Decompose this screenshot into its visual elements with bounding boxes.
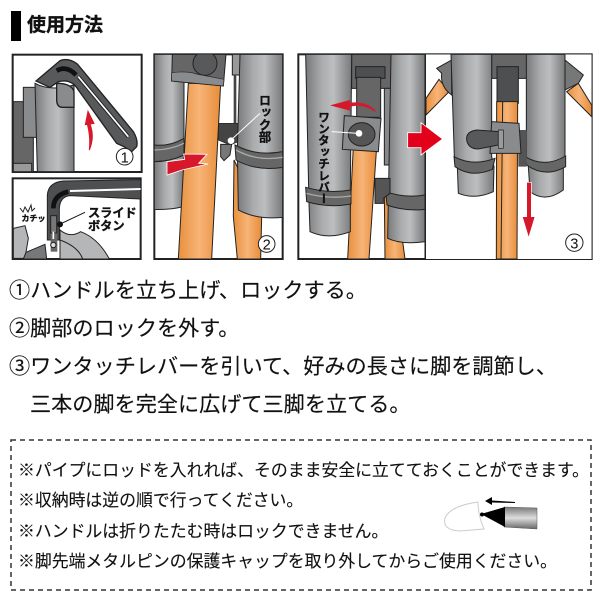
- notes text: ※脚先端メタルピンの保護キャップを取り外してからご使用ください。: [18, 551, 557, 571]
- icon: protective cap removal: [445, 497, 537, 531]
- instructions text: 三本の脚を完全に広げて三脚を立てる。: [30, 392, 411, 416]
- notes text: ※ハンドルは折りたたむ時はロックできません。: [18, 522, 388, 541]
- arrow: leg extend: [522, 182, 535, 238]
- panel: step 2 leg lock: [154, 51, 283, 259]
- label: slide button: スライド: [88, 206, 137, 220]
- panel: step 3 one-touch lever: [298, 54, 592, 259]
- left half: [352, 54, 391, 88]
- step number 3: [566, 234, 583, 252]
- label: カチッ: カチッ: [22, 214, 46, 223]
- step number 3: 3: [570, 236, 578, 252]
- label: one-touch lever: ワンタッチレバー: [316, 111, 330, 205]
- instructions text: ②脚部のロックを外す。: [9, 316, 239, 340]
- title: 使用方法: [27, 13, 103, 36]
- step number 2: [258, 236, 275, 254]
- panel: notes: [11, 440, 591, 590]
- panel: step 1 handle: [13, 55, 142, 172]
- right half: [426, 54, 592, 259]
- arrow: pull out: [167, 154, 208, 175]
- step number 1: 1: [121, 150, 129, 166]
- label: カチッ: [20, 205, 46, 223]
- instructions text: ①ハンドルを立ち上げ、ロックする。: [9, 278, 367, 302]
- step number 2: 2: [263, 238, 271, 254]
- icon: folding handle: [36, 60, 137, 152]
- notes text: ※収納時は逆の順で行ってください。: [18, 491, 303, 510]
- notes text: ※パイプにロッドを入れれば、そのまま安全に立てておくことができます。: [18, 461, 589, 480]
- arrow: up: [85, 111, 94, 150]
- label: slide button: ボタン: [88, 219, 125, 233]
- label: lock part: ロック部: [257, 94, 271, 144]
- label: slide button: [88, 206, 137, 233]
- panel: slide button detail: [13, 178, 141, 259]
- arrow: pull lever: [330, 100, 376, 112]
- notes text: [18, 461, 589, 571]
- instructions text: ③ワンタッチレバーを引いて、好みの長さに脚を調節し、: [9, 354, 557, 378]
- title: [11, 11, 103, 41]
- instructions text: [9, 278, 557, 416]
- arrow: next step: [408, 123, 443, 155]
